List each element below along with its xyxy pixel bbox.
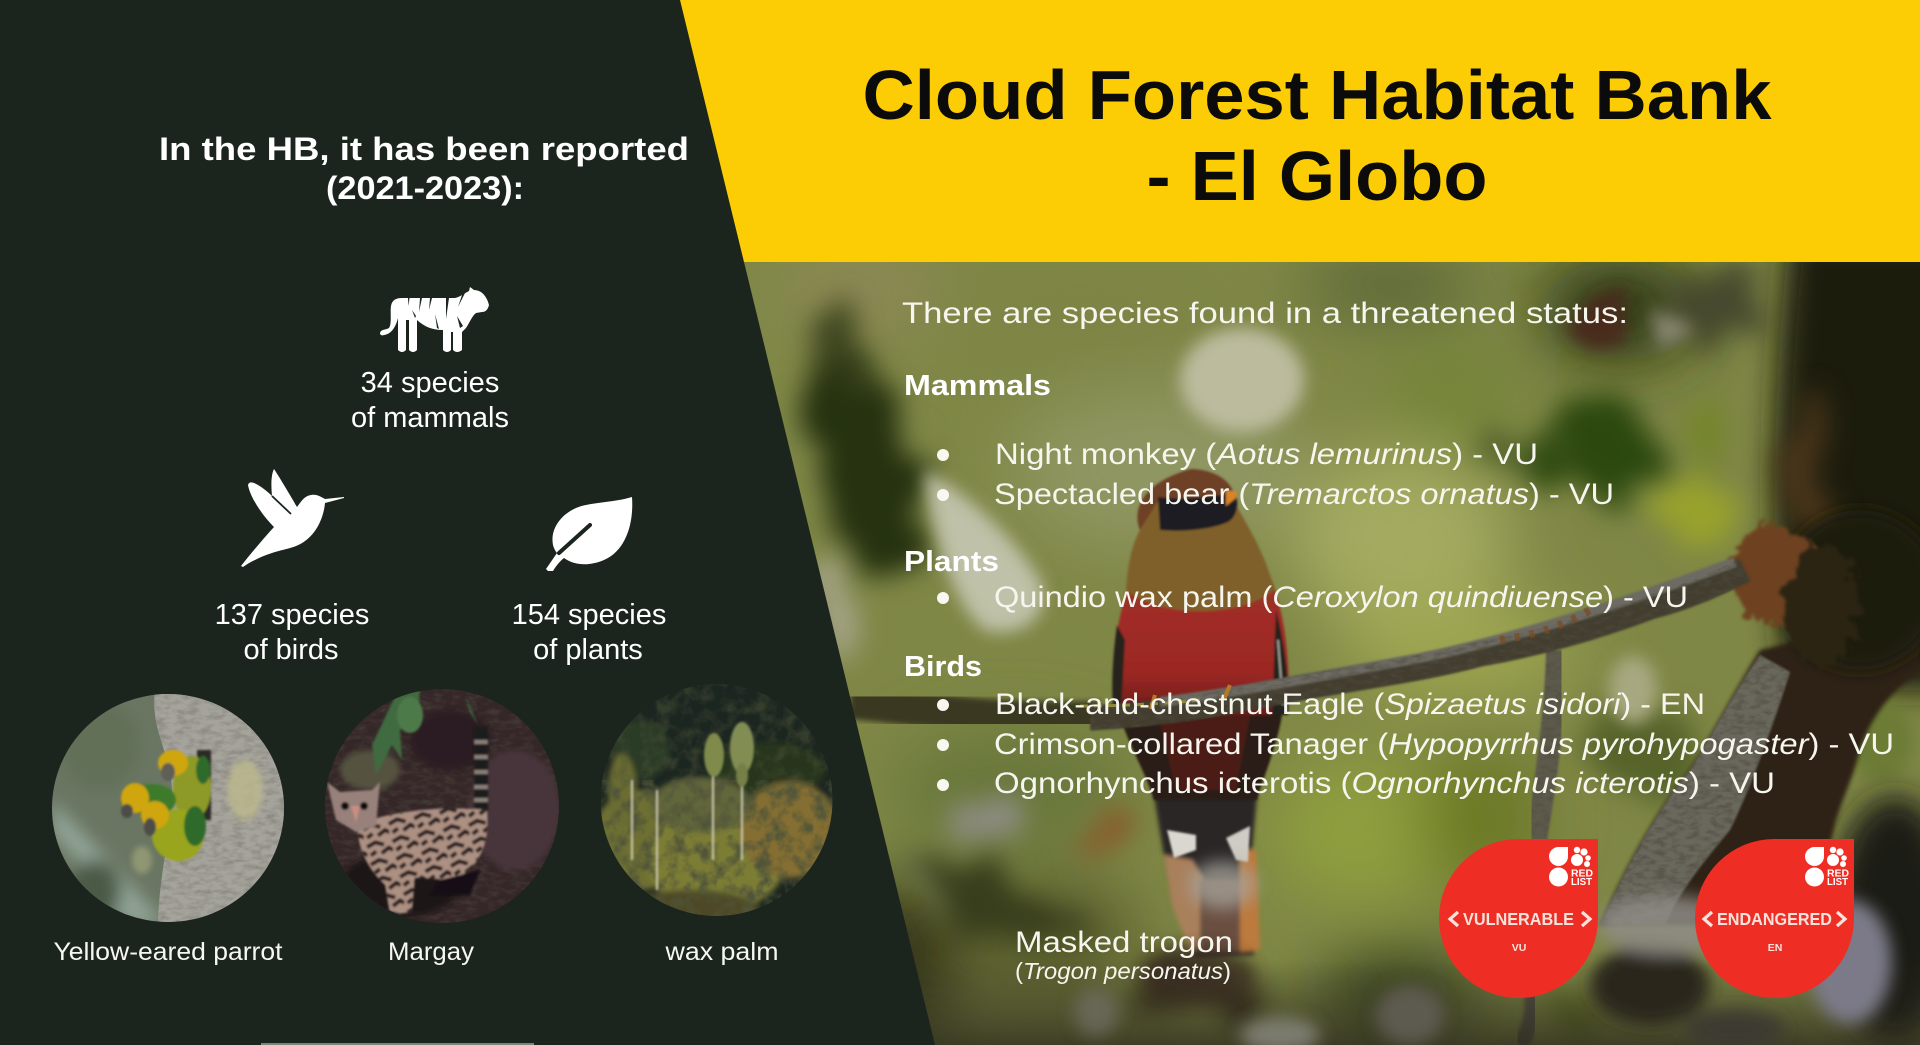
- icon: tiger: [380, 287, 489, 352]
- heading: plants: Plants: [904, 546, 999, 578]
- list: birds: Black-and-chestnut Eagle ( Spizaetus isidori ) - EN: [995, 688, 1705, 721]
- title: Cloud Forest Habitat Bank: [862, 56, 1772, 134]
- caption: wax palm: wax palm: [664, 938, 778, 966]
- icon: leaf: [546, 497, 632, 571]
- list: mammals: [937, 438, 1614, 511]
- masked trogon bird: [1112, 469, 1288, 1003]
- text: mammals count: 34 species: [361, 367, 499, 399]
- badge: endangered: EN: [1768, 942, 1782, 954]
- dark left panel: [0, 0, 935, 1045]
- photo: wax palm forest: [601, 684, 832, 916]
- title: [862, 56, 1772, 215]
- icon: red list logo: [1805, 847, 1849, 888]
- title: - El Globo: [1146, 137, 1488, 215]
- text: plants count: 154 species: [512, 599, 666, 631]
- text: mammals count: [351, 367, 509, 434]
- text: plants count: of plants: [533, 634, 643, 666]
- main branch: [850, 562, 1745, 719]
- icon: red list logo: LIST: [1827, 876, 1849, 888]
- list: birds: Crimson-collared Tanager ( Hypopyrrhus pyrohypogaster ) - VU: [994, 728, 1894, 761]
- badge: endangered: [1695, 839, 1854, 998]
- text: birds count: 137 species: [215, 599, 369, 631]
- icon: hummingbird: [241, 469, 344, 567]
- caption: masked trogon: [1015, 926, 1233, 984]
- text: plants count: [512, 599, 666, 666]
- icon: red list logo: RED: [1571, 868, 1593, 880]
- icon: red list logo: LIST: [1571, 876, 1593, 888]
- heading: mammals: Mammals: [904, 370, 1051, 402]
- list: plants: Quindio wax palm ( Ceroxylon quindiuense ) - VU: [994, 581, 1688, 614]
- list: mammals: Spectacled bear ( Tremarctos ornatus ) - VU: [994, 478, 1614, 511]
- text: mammals count: of mammals: [351, 402, 509, 434]
- background photo: masked trogon on a branch: [730, 230, 1920, 1045]
- list: birds: Ognorhynchus icterotis ( Ognorhynchus icterotis ) - VU: [994, 767, 1775, 800]
- blurred foreground bokeh: [922, 886, 1920, 1045]
- icon: red list logo: [1549, 847, 1593, 888]
- badge: endangered: ENDANGERED: [1717, 909, 1832, 929]
- photo: margay: [325, 689, 560, 923]
- tree trunk and moss at right: [1520, 510, 1920, 1045]
- yellow title banner: [680, 0, 1920, 262]
- heading: birds: Birds: [904, 651, 982, 683]
- bottom edge strip: [261, 1043, 534, 1045]
- text: birds count: of birds: [243, 634, 339, 666]
- left heading: (2021-2023):: [326, 170, 524, 206]
- badge: vulnerable: [1439, 839, 1598, 998]
- photo: yellow-eared parrot: [52, 690, 290, 925]
- text: threatened intro: There are species found in a threatened status:: [902, 297, 1628, 330]
- list: mammals: Night monkey ( Aotus lemurinus ) - VU: [995, 438, 1538, 471]
- caption: masked trogon: (Trogon personatus ): [1015, 958, 1231, 984]
- caption: margay: Margay: [388, 938, 475, 966]
- badge: vulnerable: VU: [1512, 942, 1526, 954]
- text: birds count: [215, 599, 369, 666]
- list: birds: [937, 688, 1894, 800]
- caption: parrot: Yellow-eared parrot: [54, 938, 283, 966]
- icon: red list logo: RED: [1827, 868, 1849, 880]
- left heading: In the HB, it has been reported: [159, 131, 689, 167]
- badge: vulnerable: VULNERABLE: [1463, 909, 1574, 929]
- left heading: [159, 131, 689, 206]
- caption: masked trogon: Masked trogon: [1015, 926, 1233, 959]
